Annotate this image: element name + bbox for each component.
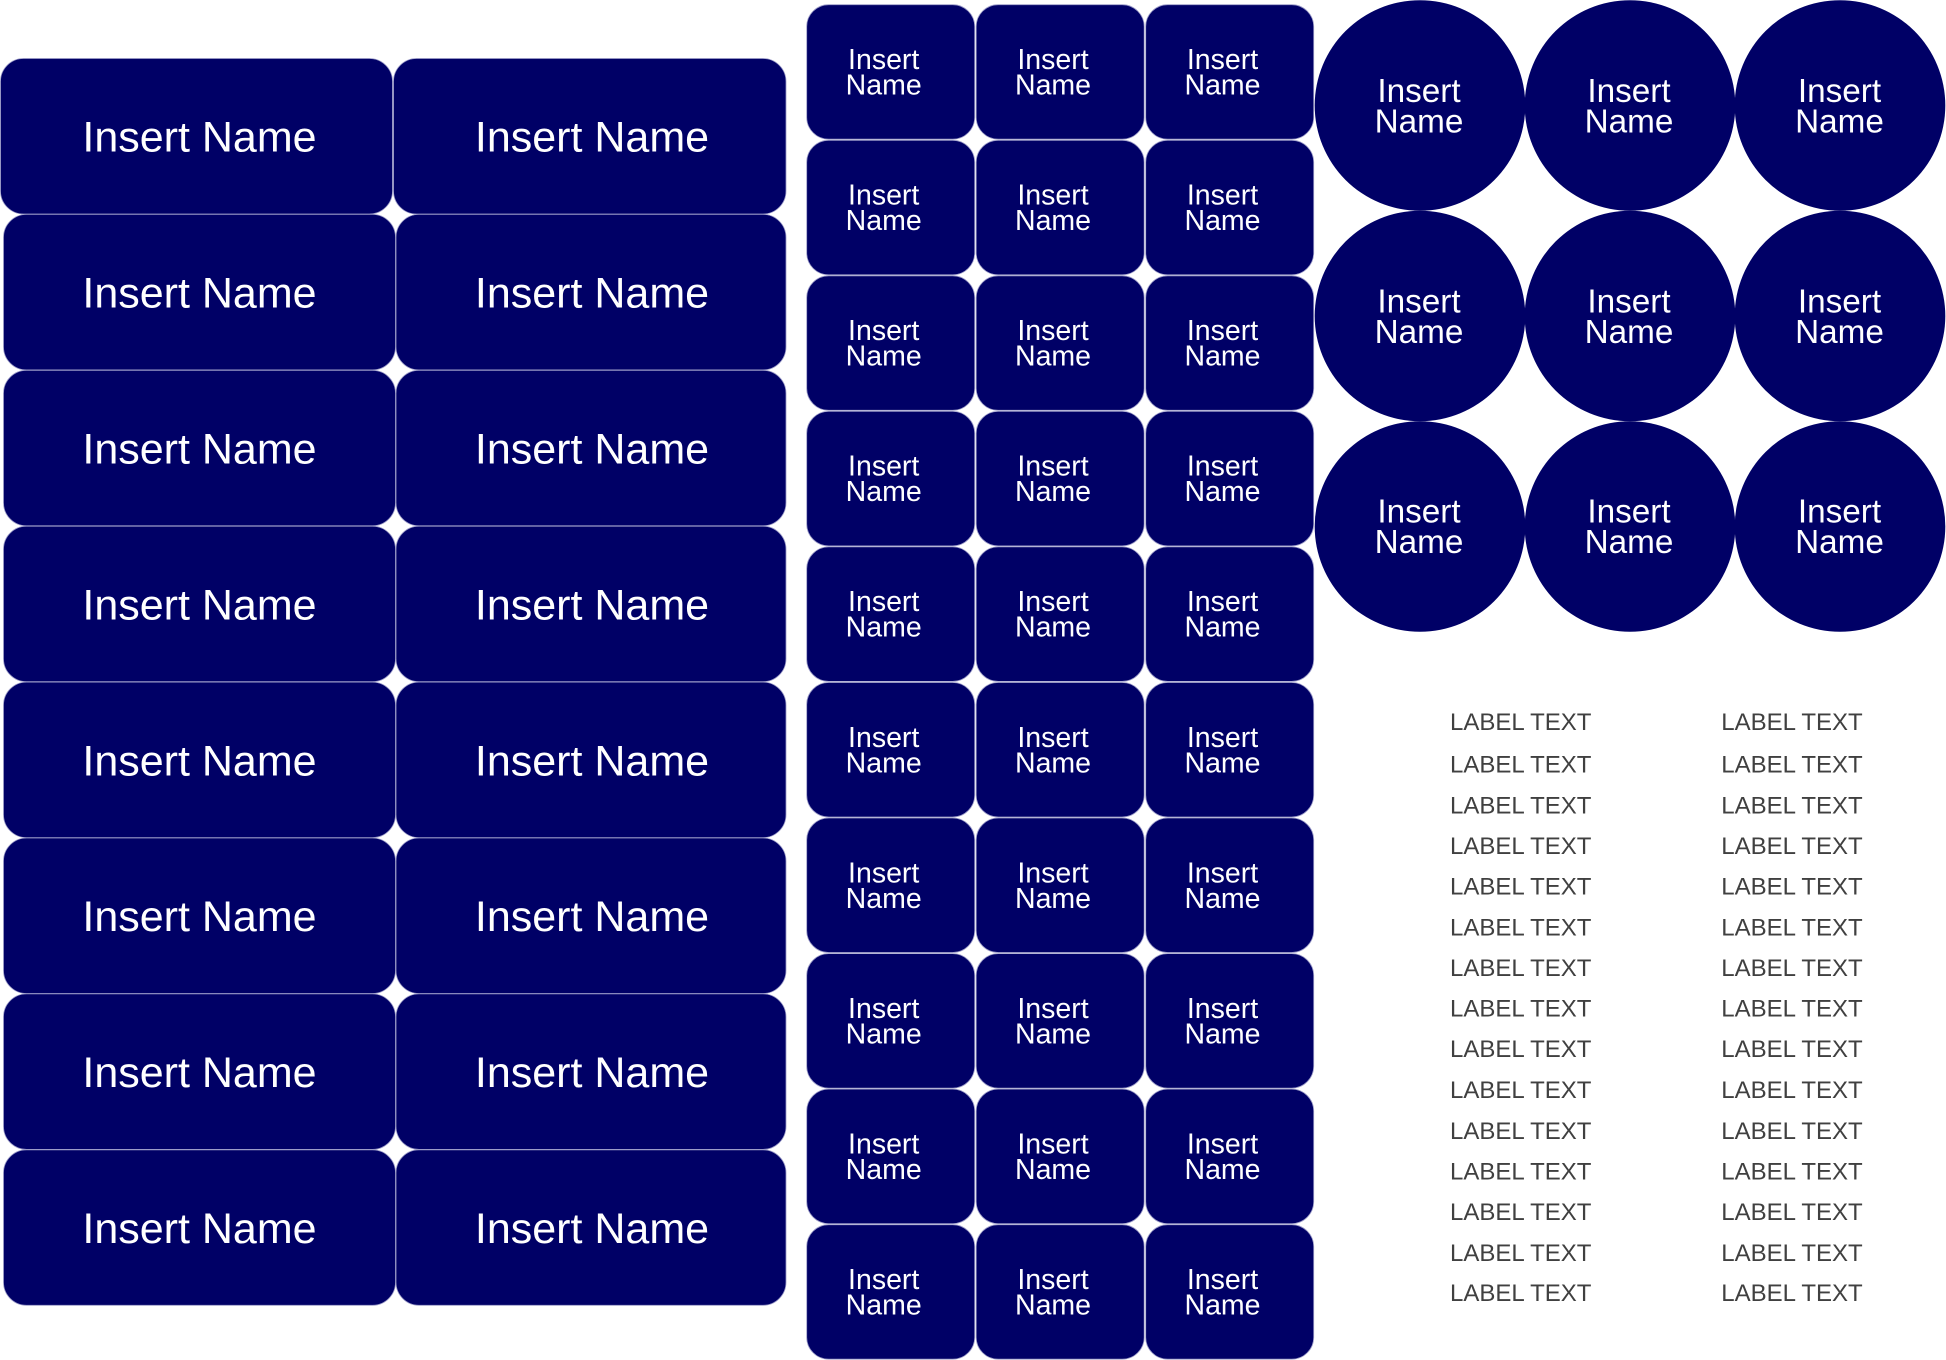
label column 2: LABEL TEXT	[1721, 1118, 1863, 1145]
circle r3 c3: Name	[1795, 524, 1884, 561]
tag r1 c3	[1146, 5, 1314, 139]
label column 2: LABEL TEXT	[1721, 1036, 1863, 1063]
tag r10 c2: Insert	[1017, 1264, 1089, 1296]
label column 1: LABEL TEXT	[1450, 1280, 1592, 1307]
tag r3 c1: Insert	[848, 315, 919, 347]
tag r1 c2: Insert	[1017, 44, 1089, 76]
tag r3 c2: Insert	[1017, 315, 1089, 347]
tag r3 c2: Name	[1015, 341, 1091, 373]
label column 1: LABEL TEXT	[1450, 1240, 1592, 1267]
tag r10 c2: Name	[1015, 1290, 1091, 1322]
tag r2 c3: Insert	[1187, 180, 1258, 212]
tag r7 c2: Insert	[1017, 857, 1089, 889]
circle r1 c1: Insert	[1377, 73, 1461, 110]
circle r3 c1: Name	[1375, 524, 1463, 561]
tag r10 c3	[1146, 1225, 1314, 1359]
circle r1 c2	[1525, 0, 1735, 211]
label column 2: LABEL TEXT	[1721, 1199, 1863, 1226]
tag r9 c2: Insert	[1017, 1128, 1089, 1160]
label column 2: LABEL TEXT	[1721, 1077, 1863, 1104]
panel: medium name tags	[807, 5, 1314, 1359]
tag r7 c2: Name	[1015, 883, 1091, 915]
tag r8 c1: Name	[846, 1018, 922, 1050]
circle r3 c2: Insert	[1587, 494, 1671, 530]
circle r3 c1	[1315, 421, 1525, 632]
tag r10 c3: Name	[1184, 1290, 1261, 1322]
tag r2 c3: Name	[1184, 205, 1261, 237]
tag r2 c1: Name	[846, 205, 922, 237]
panel: large name badges	[0, 58, 786, 1305]
large badge r6 c2	[396, 838, 786, 994]
label column 2: LABEL TEXT	[1721, 996, 1863, 1023]
tag r8 c3	[1146, 954, 1314, 1088]
tag r3 c2	[976, 276, 1144, 410]
tag r10 c1: Name	[846, 1290, 922, 1322]
tag r10 c2	[976, 1225, 1144, 1359]
tag r2 c1: Insert	[848, 180, 919, 212]
tag r8 c2: Insert	[1017, 993, 1089, 1025]
tag r5 c2: Name	[1015, 612, 1091, 644]
label column 1: LABEL TEXT	[1450, 955, 1592, 982]
tag r9 c1: Insert	[848, 1128, 919, 1160]
tag r9 c1	[807, 1089, 975, 1224]
circle r3 c3: Insert	[1798, 494, 1881, 530]
tag r2 c1	[807, 140, 975, 275]
tag r6 c2: Insert	[1017, 722, 1089, 754]
large badge r5 c2: Insert Name	[475, 737, 709, 785]
large badge r4 c1	[4, 526, 396, 682]
large badge r4 c1: Insert Name	[82, 581, 317, 629]
large badge r7 c1: Insert Name	[82, 1049, 317, 1097]
label column 2: LABEL TEXT	[1721, 1280, 1863, 1307]
tag r10 c3: Insert	[1187, 1264, 1258, 1296]
tag r4 c2: Name	[1015, 476, 1091, 508]
tag r5 c3	[1146, 547, 1314, 681]
tag r7 c3: Insert	[1187, 857, 1258, 889]
large badge r1 c1: Insert Name	[82, 114, 317, 162]
large badge r2 c1	[4, 214, 396, 370]
tag r7 c2	[976, 818, 1144, 952]
tag r7 c1: Insert	[848, 857, 919, 889]
tag r1 c1: Insert	[848, 44, 919, 76]
tag r4 c1: Name	[846, 476, 922, 508]
circle r2 c3	[1735, 211, 1945, 421]
tag r7 c1	[807, 818, 975, 952]
circle r2 c2: Name	[1585, 314, 1673, 351]
label column 1: LABEL TEXT	[1450, 874, 1592, 901]
tag r4 c1: Insert	[848, 451, 919, 483]
large badge r1 c1	[0, 58, 392, 214]
label column 1: LABEL TEXT	[1450, 833, 1592, 860]
large badge r6 c2: Insert Name	[475, 893, 709, 941]
large badge r7 c2	[396, 994, 786, 1149]
tag r5 c2: Insert	[1017, 586, 1089, 618]
large badge r8 c1: Insert Name	[82, 1205, 317, 1253]
tag r5 c2	[976, 547, 1144, 681]
label column 1: LABEL TEXT	[1450, 1158, 1592, 1185]
tag r8 c2	[976, 954, 1144, 1088]
tag r3 c1	[807, 276, 975, 410]
circle r3 c2: Name	[1585, 524, 1673, 561]
large badge r1 c2: Insert Name	[475, 114, 709, 162]
tag r10 c1: Insert	[848, 1264, 919, 1296]
tag r2 c2: Insert	[1017, 180, 1089, 212]
label column 2: LABEL TEXT	[1721, 914, 1863, 941]
circle r1 c2: Name	[1585, 104, 1673, 140]
large badge r5 c1: Insert Name	[82, 737, 317, 785]
panel: label text list	[1450, 709, 1863, 1307]
tag r7 c1: Name	[846, 883, 922, 915]
large badge r6 c1: Insert Name	[82, 893, 317, 941]
circle r1 c3	[1735, 0, 1945, 211]
large badge r3 c2: Insert Name	[475, 426, 709, 474]
label column 1: LABEL TEXT	[1450, 1036, 1592, 1063]
large badge r2 c1: Insert Name	[82, 270, 317, 318]
tag r8 c1: Insert	[848, 993, 919, 1025]
tag r5 c1	[807, 547, 975, 681]
tag r4 c2: Insert	[1017, 451, 1089, 483]
tag r1 c1	[807, 5, 975, 139]
label column 2: LABEL TEXT	[1721, 709, 1863, 736]
tag r6 c1: Insert	[848, 722, 919, 754]
label column 1: LABEL TEXT	[1450, 914, 1592, 941]
tag r1 c2: Name	[1015, 70, 1091, 102]
large badge r7 c1	[4, 994, 396, 1149]
tag r7 c3	[1146, 818, 1314, 952]
tag r6 c3: Name	[1184, 747, 1261, 779]
label column 2: LABEL TEXT	[1721, 955, 1863, 982]
tag r8 c3: Name	[1184, 1018, 1261, 1050]
large badge r4 c2: Insert Name	[475, 581, 709, 629]
circle r2 c2: Insert	[1587, 283, 1671, 320]
tag r1 c3: Insert	[1187, 44, 1258, 76]
large badge r4 c2	[396, 526, 786, 682]
tag r6 c2	[976, 682, 1144, 817]
label column 1: LABEL TEXT	[1450, 752, 1592, 779]
large badge r8 c2	[396, 1150, 786, 1305]
tag r4 c3	[1146, 411, 1314, 546]
tag r4 c1	[807, 411, 975, 546]
tag r5 c3: Insert	[1187, 586, 1258, 618]
tag r2 c2: Name	[1015, 205, 1091, 237]
large badge r6 c1	[4, 838, 396, 994]
label column 1: LABEL TEXT	[1450, 996, 1592, 1023]
circle r3 c1: Insert	[1377, 494, 1461, 530]
label column 2: LABEL TEXT	[1721, 1158, 1863, 1185]
large badge r8 c1	[4, 1150, 396, 1305]
tag r3 c3: Name	[1184, 341, 1261, 373]
tag r3 c1: Name	[846, 341, 922, 373]
label column 2	[1721, 709, 1863, 1307]
circle r2 c2	[1525, 211, 1735, 421]
tag r6 c3	[1146, 682, 1314, 817]
large badge r3 c1: Insert Name	[82, 426, 317, 474]
circle r2 c1: Name	[1375, 314, 1463, 351]
label column 1: LABEL TEXT	[1450, 1199, 1592, 1226]
label column 2: LABEL TEXT	[1721, 793, 1863, 820]
label column 2: LABEL TEXT	[1721, 874, 1863, 901]
circle r1 c3: Name	[1795, 104, 1884, 140]
label column 2: LABEL TEXT	[1721, 752, 1863, 779]
tag r1 c3: Name	[1184, 70, 1261, 102]
tag r7 c3: Name	[1184, 883, 1261, 915]
large badge r7 c2: Insert Name	[475, 1049, 709, 1097]
tag r8 c3: Insert	[1187, 993, 1258, 1025]
tag r2 c3	[1146, 140, 1314, 275]
large badge r8 c2: Insert Name	[475, 1205, 709, 1253]
circle r1 c1: Name	[1375, 104, 1463, 140]
large badge r2 c2: Insert Name	[475, 270, 709, 318]
tag r5 c3: Name	[1184, 612, 1261, 644]
tag r6 c1: Name	[846, 747, 922, 779]
label column 1: LABEL TEXT	[1450, 793, 1592, 820]
tag r9 c3	[1146, 1089, 1314, 1224]
circle r2 c3: Insert	[1798, 283, 1881, 320]
tag r6 c2: Name	[1015, 747, 1091, 779]
label column 2: LABEL TEXT	[1721, 1240, 1863, 1267]
tag r2 c2	[976, 140, 1144, 275]
tag r3 c3	[1146, 276, 1314, 410]
tag r8 c2: Name	[1015, 1018, 1091, 1050]
tag r1 c2	[976, 5, 1144, 139]
label column 1: LABEL TEXT	[1450, 709, 1592, 736]
tag r9 c3: Insert	[1187, 1128, 1258, 1160]
tag r9 c2	[976, 1089, 1144, 1224]
label column 2: LABEL TEXT	[1721, 833, 1863, 860]
circle r2 c3: Name	[1795, 314, 1884, 351]
circle r1 c1	[1315, 0, 1525, 211]
large badge r5 c1	[4, 682, 396, 838]
label column 1: LABEL TEXT	[1450, 1077, 1592, 1104]
circle r1 c2: Insert	[1587, 73, 1671, 110]
circle r2 c1	[1315, 211, 1525, 421]
tag r10 c1	[807, 1225, 975, 1359]
large badge r1 c2	[394, 58, 786, 214]
tag r6 c1	[807, 682, 975, 817]
panel: circular name stickers	[1315, 0, 1945, 632]
tag r4 c3: Name	[1184, 476, 1261, 508]
tag r3 c3: Insert	[1187, 315, 1258, 347]
label column 1: LABEL TEXT	[1450, 1118, 1592, 1145]
tag r5 c1: Name	[846, 612, 922, 644]
tag r8 c1	[807, 954, 975, 1088]
large badge r2 c2	[396, 214, 786, 370]
circle r3 c2	[1525, 421, 1735, 632]
label column 1	[1450, 709, 1592, 1307]
large badge r5 c2	[396, 682, 786, 838]
tag r9 c1: Name	[846, 1154, 922, 1186]
tag r4 c3: Insert	[1187, 451, 1258, 483]
circle r3 c3	[1735, 421, 1945, 632]
tag r4 c2	[976, 411, 1144, 546]
tag r5 c1: Insert	[848, 586, 919, 618]
circle r1 c3: Insert	[1798, 73, 1881, 110]
tag r9 c2: Name	[1015, 1154, 1091, 1186]
tag r1 c1: Name	[846, 70, 922, 102]
tag r9 c3: Name	[1184, 1154, 1261, 1186]
tag r6 c3: Insert	[1187, 722, 1258, 754]
large badge r3 c1	[4, 370, 396, 526]
circle r2 c1: Insert	[1377, 283, 1461, 320]
large badge r3 c2	[396, 370, 786, 526]
